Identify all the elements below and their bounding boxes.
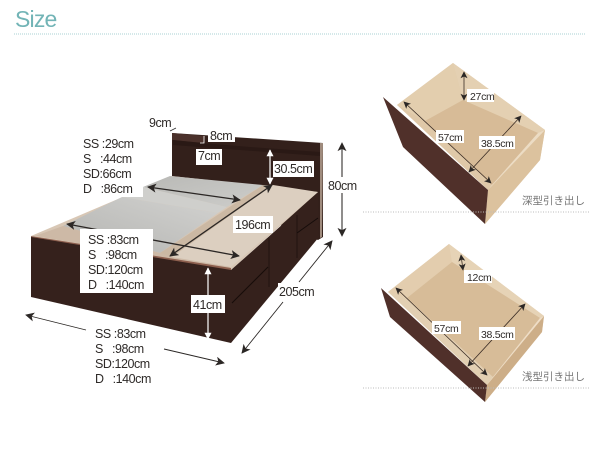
bed front panel <box>31 237 231 343</box>
bracket 9cm <box>170 128 176 131</box>
mattress length arrow <box>170 185 272 256</box>
list: headboard-side widths: SD:66cm <box>83 167 131 181</box>
list: bed widths: SD:120cm <box>95 357 150 371</box>
list: mattress widths <box>80 229 153 293</box>
label: 38.5cm: 38.5cm <box>481 138 514 150</box>
caption: shallow drawer: 浅型引き出し <box>522 370 585 383</box>
bed illustration <box>26 128 342 363</box>
shallow drawer <box>381 244 544 402</box>
arrow 205cm <box>242 241 332 353</box>
drawer front panel <box>383 97 488 224</box>
label: 205cm: 205cm <box>279 285 314 299</box>
list: mattress widths: SD:120cm <box>88 263 143 277</box>
list: bed widths: SS :83cm <box>95 327 146 341</box>
list: mattress widths: S :98cm <box>88 248 137 262</box>
drawer body <box>397 63 545 224</box>
arrow 80cm <box>341 143 343 236</box>
list: mattress widths: SS :83cm <box>88 233 139 247</box>
list: headboard-side widths: S :44cm <box>83 152 132 166</box>
arrow 30.5cm <box>269 150 271 184</box>
list: headboard-side widths: SS :29cm <box>83 137 134 151</box>
list: headboard-side widths: D :86cm <box>83 182 132 196</box>
label: 196cm: 196cm <box>235 218 270 232</box>
bed top surface <box>31 176 318 271</box>
list: bed widths: D :140cm <box>95 372 151 386</box>
caption: deep drawer: 深型引き出し <box>522 194 585 207</box>
mattress width arrow rear <box>148 187 240 200</box>
title: Size <box>15 6 57 32</box>
list: bed widths: S :98cm <box>95 342 144 356</box>
label: 9cm: 9cm <box>149 116 171 130</box>
label: 12cm: 12cm <box>467 272 492 284</box>
arrow bed width <box>26 315 224 363</box>
label: 27cm: 27cm <box>470 91 495 103</box>
list: mattress widths: D :140cm <box>88 278 144 292</box>
label: 38.5cm: 38.5cm <box>481 329 514 341</box>
drawer body <box>388 244 544 402</box>
label: 8cm: 8cm <box>210 129 232 143</box>
label: 41cm <box>191 295 225 313</box>
arrow 41cm <box>207 268 209 339</box>
label: 41cm: 41cm <box>193 298 222 312</box>
label: 7cm: 7cm <box>198 149 220 163</box>
label: 57cm: 57cm <box>434 323 459 335</box>
headboard <box>172 133 323 240</box>
drawer arrows <box>396 288 487 375</box>
mattress width arrow front <box>67 224 239 256</box>
bed side with drawers <box>231 193 319 343</box>
label: 30.5cm: 30.5cm <box>274 162 312 176</box>
label: 57cm: 57cm <box>438 132 463 144</box>
deep drawer <box>383 63 545 224</box>
list: bed widths <box>95 327 151 386</box>
list: headboard-side widths <box>80 135 143 197</box>
bracket 8cm <box>200 136 204 143</box>
drawer front panel <box>381 288 487 402</box>
label: 80cm: 80cm <box>328 179 357 193</box>
drawer arrows <box>404 102 491 183</box>
